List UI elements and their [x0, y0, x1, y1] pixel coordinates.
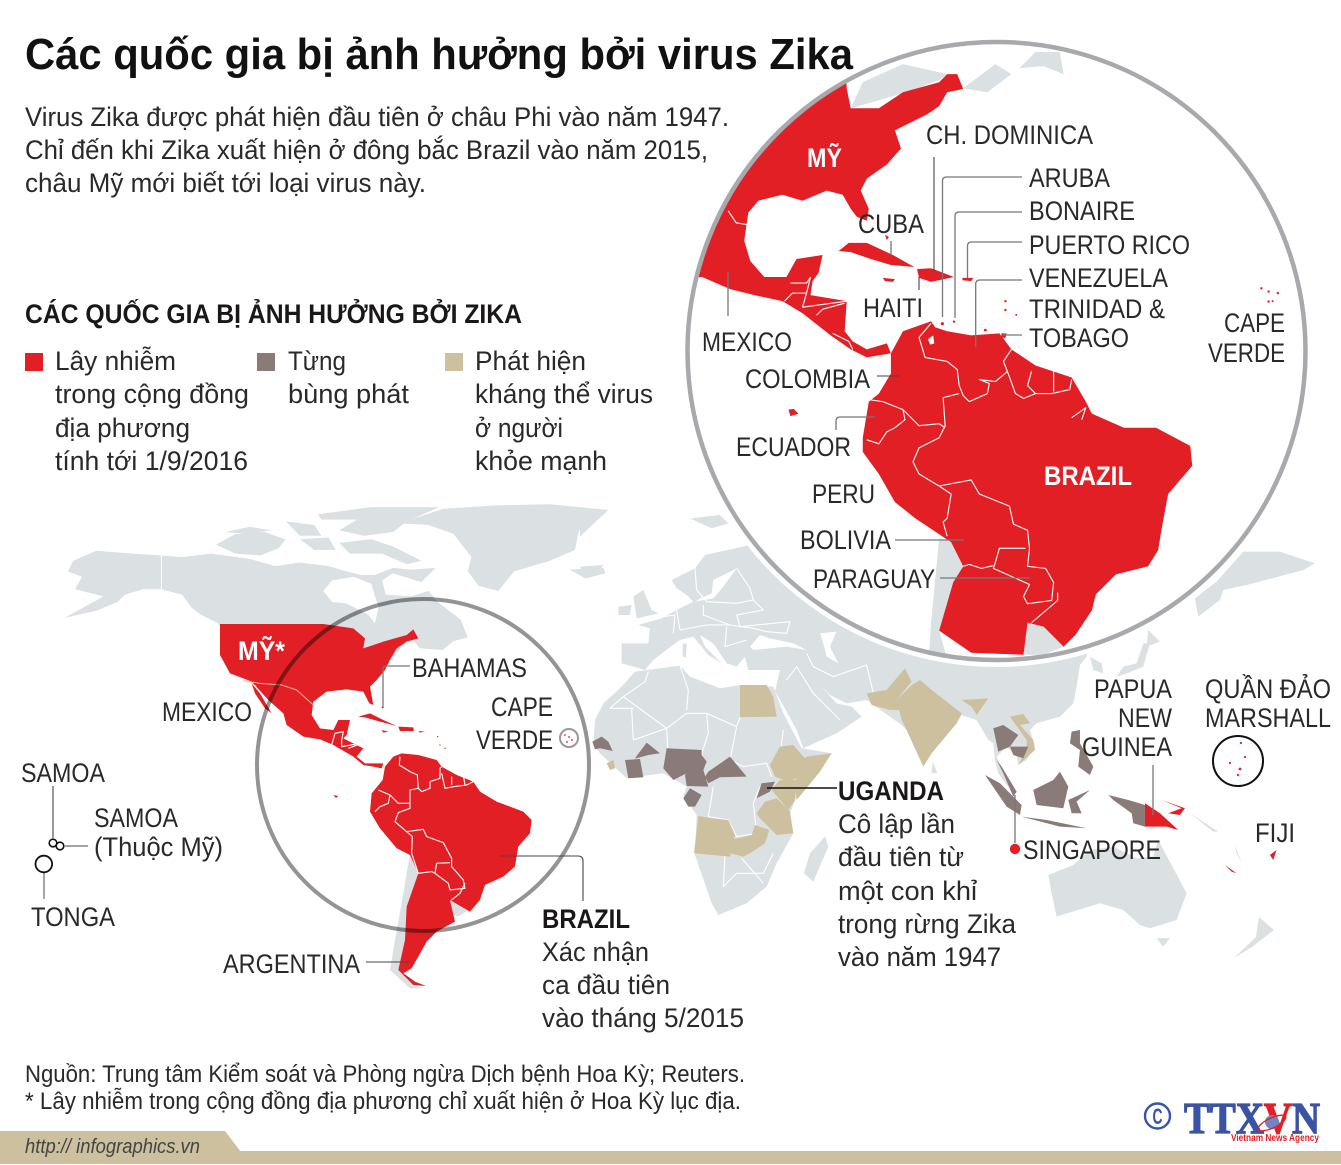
labels in big circle: ARUBA — [1029, 163, 1110, 193]
icon: Cape Verde marker — [560, 729, 578, 747]
South America red — [863, 321, 1192, 655]
Baltic Sea — [695, 568, 737, 602]
Eurasia land — [622, 520, 1090, 792]
Jamaica — [883, 278, 895, 282]
labels in big circle: MEXICO — [702, 327, 792, 357]
borders of Latin America — [919, 323, 1011, 402]
labels on world map: CAPE — [491, 692, 553, 722]
title: Các quốc gia bị ảnh hưởng bởi virus Zika — [25, 30, 853, 79]
icon: Singapore dot — [1010, 844, 1020, 854]
callout: Uganda: UGANDA — [838, 776, 944, 806]
labels in big circle: HAITI — [863, 293, 923, 323]
Papua New Guinea — [1145, 803, 1178, 830]
Hispaniola — [917, 268, 954, 282]
intro text block — [25, 102, 729, 198]
icon: copyright: C — [1152, 1104, 1163, 1129]
small circle highlighting Americas — [257, 599, 589, 931]
Bahamas — [885, 235, 889, 240]
icon: American Samoa marker — [56, 842, 64, 850]
source note — [25, 1061, 745, 1115]
intro text block: Chỉ đến khi Zika xuất hiện ở đông bắc Brazil vào năm 2015, — [25, 134, 708, 165]
North America land — [64, 504, 609, 659]
Thailand — [993, 725, 1018, 752]
borders Africa — [623, 697, 740, 728]
callout: Uganda: Cô lập lần — [838, 809, 955, 839]
intro text block: Virus Zika được phát hiện đầu tiên ở châu Phi vào năm 1947. — [25, 102, 729, 132]
labels on world map: SAMOA — [94, 803, 178, 833]
labels in big circle: MỸ — [807, 142, 842, 173]
legend item: local transmission: Lây nhiễm — [55, 345, 176, 376]
callout: Uganda: vào năm 1947 — [838, 942, 1001, 972]
callout: Brazil: ca đầu tiên — [542, 970, 670, 1000]
Canada land — [851, 64, 947, 108]
legend item: antibodies detected — [445, 346, 653, 476]
Central African Republic — [705, 757, 747, 783]
Puerto Rico — [962, 278, 973, 281]
North America red — [698, 74, 964, 358]
legend item: local transmission: tính tới 1/9/2016 — [55, 446, 248, 476]
Cambodia — [1010, 747, 1028, 758]
labels on world map: NEW — [1118, 703, 1172, 733]
Caspian Sea — [820, 632, 838, 663]
New Caledonia — [1225, 865, 1237, 873]
labels on world map: VERDE — [476, 725, 553, 755]
Nigeria — [663, 748, 702, 780]
Pakistan — [867, 668, 912, 710]
Tanzania — [757, 798, 793, 835]
Philippines — [1070, 730, 1093, 775]
callout: Brazil: Xác nhận — [542, 937, 649, 967]
Senegal — [592, 737, 613, 751]
Angola — [694, 816, 735, 857]
Kenya — [772, 780, 797, 810]
legend heading: CÁC QUỐC GIA BỊ ẢNH HƯỞNG BỞI ZIKA — [25, 297, 522, 329]
world map — [64, 504, 1315, 988]
callout: Brazil — [542, 904, 744, 1033]
Burkina Faso — [635, 743, 660, 758]
callout: Brazil: vào tháng 5/2015 — [542, 1003, 744, 1033]
icon: copyright — [1145, 1104, 1170, 1129]
labels in big circle: CH. DOMINICA — [926, 120, 1093, 150]
labels in big circle: VENEZUELA — [1029, 263, 1168, 293]
Gabon — [683, 788, 702, 807]
legend item: antibodies detected: kháng thể virus — [475, 379, 653, 409]
Cape Verde islands — [1260, 287, 1279, 303]
Black Sea — [750, 635, 807, 650]
labels in big circle: PARAGUAY — [813, 564, 935, 594]
India — [897, 680, 962, 767]
Greenland — [1019, 52, 1064, 74]
icon: globe — [1256, 1112, 1288, 1134]
labels in big circle: CUBA — [858, 209, 924, 239]
Sulawesi — [1068, 790, 1090, 813]
labels on world map: MEXICO — [162, 697, 252, 727]
labels on world map: ARGENTINA — [223, 949, 360, 979]
labels in big circle: TRINIDAD & — [1029, 294, 1165, 324]
labels in big circle: PUERTO RICO — [1029, 230, 1190, 260]
islands — [580, 510, 1315, 958]
logo: TTXVN: TTXVN — [1184, 1094, 1320, 1143]
labels on world map: PAPUA — [1094, 674, 1172, 704]
Newfoundland — [963, 64, 1011, 92]
labels on world map — [21, 635, 1331, 979]
Solomon and Vanuatu islands — [1190, 813, 1218, 832]
callout: Uganda — [838, 776, 1017, 972]
Lake Maracaibo — [928, 335, 934, 345]
labels in big circle: BOLIVIA — [800, 525, 891, 555]
icon: Marshall Islands marker — [1213, 736, 1263, 786]
Java — [1022, 817, 1087, 828]
labels in big circle: PERU — [812, 479, 875, 509]
Old World — [580, 510, 1315, 958]
labels on world map: GUINEA — [1082, 732, 1172, 762]
Cuba — [839, 243, 914, 267]
Sumatra — [985, 775, 1022, 815]
legend item: antibodies detected: ở người — [475, 413, 563, 443]
leader lines in big circle — [728, 157, 1030, 578]
legend item: past outbreak: bùng phát — [288, 379, 409, 409]
legend item: past outbreak: Từng — [288, 346, 346, 376]
leader lines on world map — [44, 666, 1153, 962]
labels on world map: BAHAMAS — [412, 653, 527, 683]
labels in big circle: ECUADOR — [736, 432, 851, 462]
source note: * Lây nhiễm trong cộng đồng địa phương chỉ xuất hiện ở Hoa Kỳ lục địa. — [25, 1088, 741, 1115]
Cameroon — [685, 755, 708, 787]
Uruguay land — [1023, 623, 1064, 655]
legend item: antibodies detected: Phát hiện — [475, 346, 586, 376]
Galapagos islands — [788, 409, 798, 416]
labels on world map: SINGAPORE — [1023, 835, 1161, 865]
labels in big circle: VERDE — [1208, 338, 1285, 368]
legend item: antibodies detected: khỏe mạnh — [475, 446, 607, 476]
Somalia — [795, 753, 832, 800]
Borneo — [1033, 772, 1068, 808]
Vietnam — [1010, 714, 1035, 765]
labels on world map: MỸ* — [238, 635, 285, 666]
labels in big circle: CAPE — [1224, 308, 1285, 338]
legend — [25, 345, 653, 476]
Chile land — [929, 538, 963, 659]
Africa land — [593, 666, 832, 915]
legend item: local transmission: địa phương — [55, 413, 190, 443]
Americas: affected countries — [220, 624, 532, 988]
intro text block: châu Mỹ mới biết tới loại virus này. — [25, 168, 426, 198]
callout: Uganda: một con khỉ — [838, 876, 977, 906]
legend item: local transmission: trong cộng đồng — [55, 379, 249, 409]
legend item: past outbreak — [257, 346, 409, 409]
Ivory Coast — [625, 759, 643, 778]
labels in big circle: COLOMBIA — [745, 364, 870, 394]
Uganda — [757, 782, 775, 798]
borders Europe and Asia — [695, 568, 790, 633]
labels in big circle: BONAIRE — [1029, 196, 1135, 226]
footer bar: http:// infographics.vn — [25, 1136, 200, 1158]
labels on world map: TONGA — [31, 902, 115, 932]
Zambia — [730, 825, 769, 857]
panel: zoomed Americas circle — [666, 35, 1312, 667]
icon: Samoa marker — [49, 839, 57, 847]
footer bar — [0, 1131, 1341, 1164]
logo: TTXVN: Vietnam News Agency — [1231, 1133, 1319, 1144]
Liberia — [607, 760, 615, 770]
West Papua — [1108, 795, 1145, 827]
labels on world map: (Thuộc Mỹ) — [94, 832, 223, 862]
Egypt — [740, 685, 777, 717]
labels in big circle: BRAZIL — [1044, 461, 1132, 491]
Malay Peninsula — [997, 760, 1017, 797]
source note: Nguồn: Trung tâm Kiểm soát và Phòng ngừa Dịch bệnh Hoa Kỳ; Reuters. — [25, 1061, 745, 1088]
Ethiopia — [770, 745, 820, 782]
labels in big circle: TOBAGO — [1029, 323, 1129, 353]
Trinidad — [1001, 333, 1007, 338]
labels in big circle — [702, 120, 1285, 594]
labels on world map: SAMOA — [21, 758, 105, 788]
callout: Uganda: trong rừng Zika — [838, 909, 1017, 939]
labels on world map: FIJI — [1255, 818, 1295, 848]
icon: Tonga marker — [36, 856, 52, 872]
callout: Uganda: đầu tiên từ — [838, 842, 964, 872]
Bangladesh region — [962, 698, 988, 715]
callout: Brazil: BRAZIL — [542, 904, 630, 934]
legend item: local transmission — [25, 345, 249, 476]
Lesser Antilles — [941, 300, 1017, 332]
Fiji islands — [1270, 850, 1277, 860]
